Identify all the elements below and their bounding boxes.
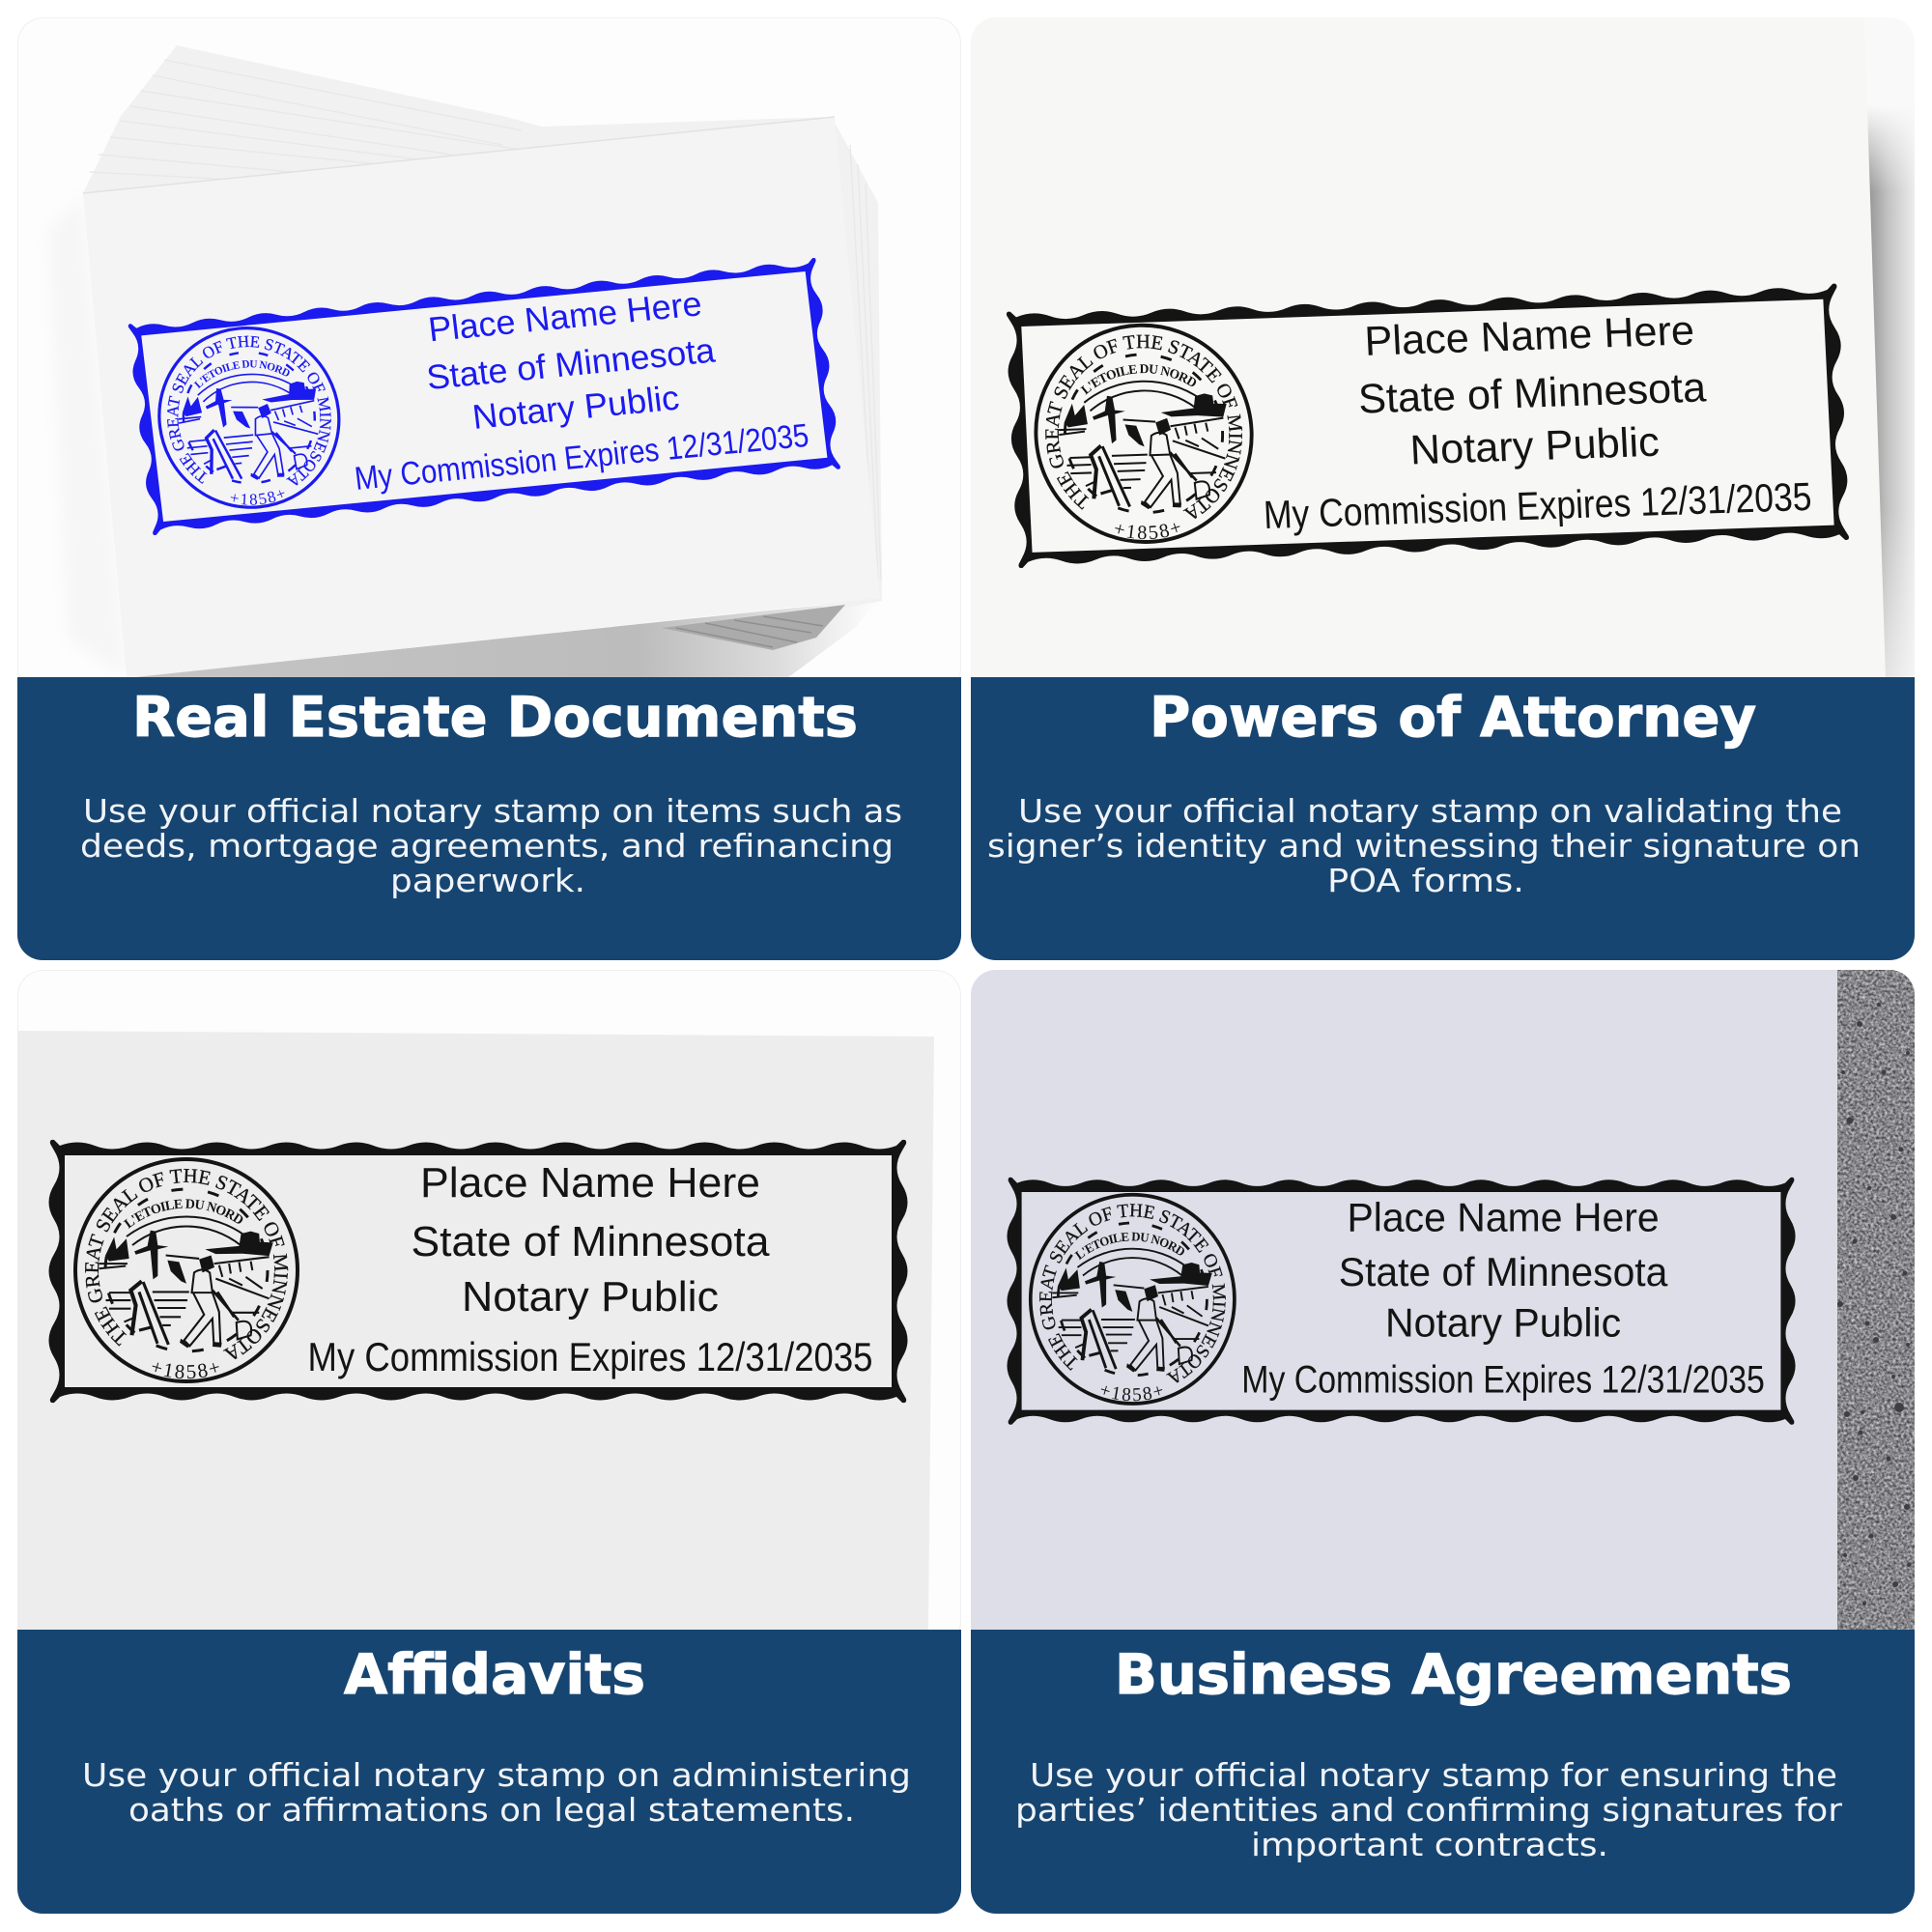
state seal: THE GREAT SEAL OF THE STATE OF MINNESOTA bbox=[1039, 1204, 1226, 1383]
stamp text bbox=[307, 1159, 873, 1379]
text band bbox=[17, 1630, 961, 1914]
stamp text: Place Name Here bbox=[1363, 307, 1695, 365]
description bbox=[1015, 1756, 1842, 1863]
photo: white sheet bbox=[17, 970, 961, 1630]
description: Use your official notary stamp on items such as bbox=[83, 792, 902, 830]
stamp text: Notary Public bbox=[462, 1273, 719, 1321]
stamp text: Place Name Here bbox=[426, 284, 704, 349]
description: oaths or affirmations on legal statements. bbox=[128, 1791, 855, 1829]
description bbox=[987, 792, 1861, 899]
photo: paper sheet with shadow bbox=[971, 17, 1915, 677]
photo: stack of white envelopes bbox=[17, 17, 961, 677]
text band bbox=[17, 677, 961, 960]
state seal: +1858+ bbox=[1115, 524, 1180, 539]
stamp text: Notary Public bbox=[1409, 419, 1661, 473]
panel: business agreements bbox=[971, 970, 1915, 1914]
panel: real estate documents bbox=[17, 17, 961, 960]
stamp text: My Commission Expires 12/31/2035 bbox=[1263, 474, 1812, 537]
stamp impression: black bbox=[1007, 284, 1849, 568]
stamp text: Notary Public bbox=[470, 379, 681, 437]
description: parties’ identities and confirming signatures for bbox=[1015, 1791, 1842, 1829]
state seal: THE GREAT SEAL OF THE STATE OF MINNESOTA bbox=[167, 336, 331, 485]
heading: Real Estate Documents bbox=[132, 686, 858, 750]
stamp text bbox=[355, 297, 808, 495]
description bbox=[82, 1756, 911, 1829]
stamp text: State of Minnesota bbox=[412, 1218, 770, 1265]
stamp text: State of Minnesota bbox=[1357, 364, 1707, 423]
stamp impression: black bbox=[48, 1140, 908, 1403]
stamp text: Place Name Here bbox=[420, 1159, 760, 1207]
state seal: +1858+ bbox=[230, 491, 284, 505]
state seal: L'ETOILE DU NORD bbox=[193, 359, 290, 388]
stamp text: Place Name Here bbox=[1348, 1195, 1660, 1240]
state seal: THE GREAT SEAL OF THE STATE OF MINNESOTA bbox=[85, 1169, 288, 1360]
description: Use your official notary stamp for ensuring the bbox=[1030, 1756, 1837, 1794]
heading: Business Agreements bbox=[1115, 1643, 1792, 1707]
description: POA forms. bbox=[1327, 862, 1524, 899]
state seal: +1858+ bbox=[1101, 1385, 1163, 1401]
state seal: L'ETOILE DU NORD bbox=[1074, 1233, 1184, 1260]
text band bbox=[971, 1630, 1915, 1914]
state seal: THE GREAT SEAL OF THE STATE OF MINNESOTA bbox=[1045, 334, 1242, 519]
state seal: L'ETOILE DU NORD bbox=[124, 1199, 243, 1229]
description: Use your official notary stamp on administering bbox=[82, 1756, 911, 1794]
state seal: +1858+ bbox=[153, 1362, 219, 1379]
description bbox=[80, 792, 902, 899]
stamp impression: black bbox=[1007, 1177, 1796, 1425]
stamp text: State of Minnesota bbox=[424, 331, 717, 397]
photo: lavender paper on concrete bbox=[971, 970, 1915, 1630]
description: Use your official notary stamp on validating the bbox=[1018, 792, 1842, 830]
state seal: L'ETOILE DU NORD bbox=[1080, 364, 1196, 395]
stamp text: State of Minnesota bbox=[1339, 1249, 1668, 1294]
description: paperwork. bbox=[390, 862, 585, 899]
stamp text: My Commission Expires 12/31/2035 bbox=[1241, 1359, 1765, 1402]
text band bbox=[971, 677, 1915, 960]
description: deeds, mortgage agreements, and refinancing bbox=[80, 827, 894, 865]
panel: powers of attorney bbox=[971, 17, 1915, 960]
stamp text bbox=[1254, 303, 1812, 537]
panel: affidavits bbox=[17, 970, 961, 1914]
stamp text: My Commission Expires 12/31/2035 bbox=[307, 1334, 873, 1379]
description: signer’s identity and witnessing their signature on bbox=[987, 827, 1861, 865]
stamp text: My Commission Expires 12/31/2035 bbox=[353, 417, 810, 497]
stamp text: Notary Public bbox=[1385, 1300, 1621, 1346]
heading: Powers of Attorney bbox=[1150, 686, 1756, 750]
stamp impression: blue bbox=[128, 258, 840, 535]
concrete edge bbox=[1837, 970, 1915, 1631]
heading: Affidavits bbox=[344, 1643, 645, 1707]
stamp text bbox=[1241, 1195, 1765, 1402]
description: important contracts. bbox=[1251, 1826, 1608, 1863]
